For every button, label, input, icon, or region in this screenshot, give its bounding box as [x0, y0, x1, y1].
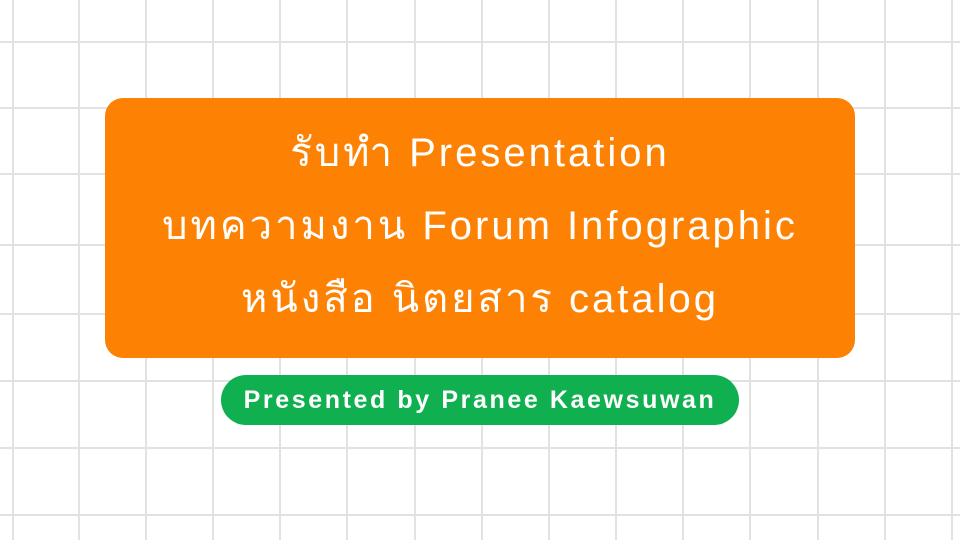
title line 2: บทความงาน Forum Infographic [162, 204, 798, 248]
title panel [105, 98, 855, 358]
title line 1: รับทำ Presentation [290, 131, 670, 175]
presenter pill: Presented by Pranee Kaewsuwan [244, 386, 716, 414]
presenter pill [221, 375, 739, 425]
title line 3: หนังสือ นิตยสาร catalog [241, 277, 719, 321]
